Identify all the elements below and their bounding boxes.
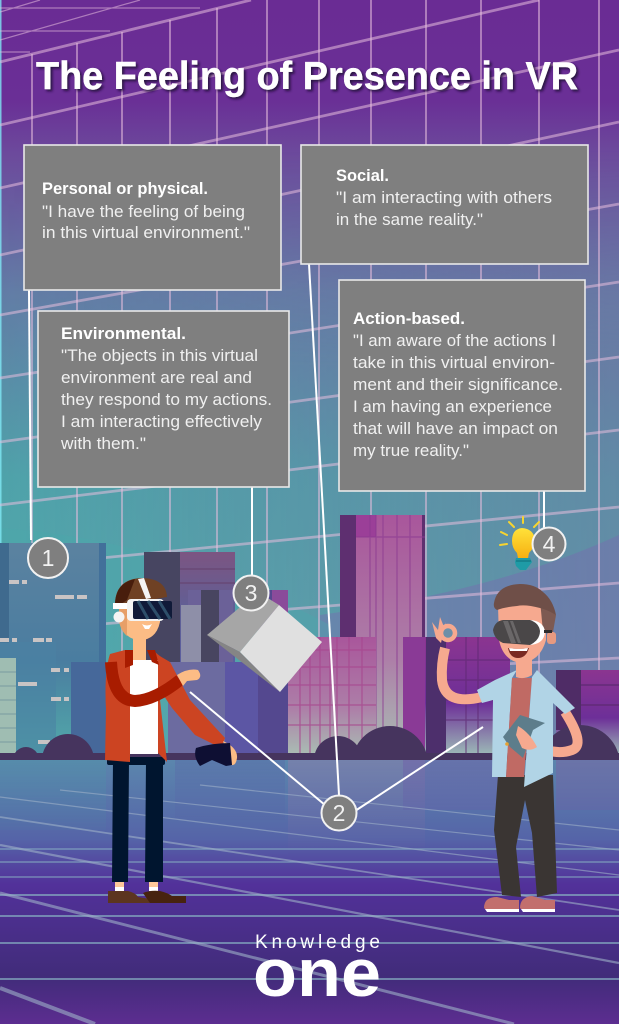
badge 2: 2 xyxy=(333,800,345,826)
hand and controller xyxy=(223,741,237,765)
vr headset xyxy=(113,603,133,609)
neck xyxy=(516,658,532,678)
shoes xyxy=(484,897,519,912)
building: tall magenta tower xyxy=(340,515,425,757)
panel: social: Social. xyxy=(336,167,389,185)
shirt xyxy=(477,670,517,777)
panel: environmental: with them." xyxy=(60,435,146,453)
badge 3 xyxy=(234,576,268,610)
character: man in blue shirt xyxy=(432,584,578,912)
hair xyxy=(494,584,556,615)
panel: environmental: they respond to my actions. xyxy=(61,391,272,409)
icon: light bulb xyxy=(500,517,539,570)
panel: action-based: Action-based. xyxy=(353,310,465,328)
badge 4 xyxy=(532,528,566,560)
logo: Knowledge one: one xyxy=(253,935,381,1011)
head xyxy=(119,600,160,640)
controller and hand xyxy=(503,715,545,758)
badge 1: 1 xyxy=(42,545,54,571)
jacket back arm xyxy=(158,655,225,748)
panel: personal or physical: in this virtual environment." xyxy=(42,224,250,242)
connector lines xyxy=(29,264,544,811)
perspective grid in sky xyxy=(0,0,619,700)
front arm xyxy=(111,662,180,701)
character: man in red jacket xyxy=(105,578,237,903)
building: blue tower left xyxy=(0,543,106,757)
panel: environmental: "The objects in this virtual xyxy=(61,347,258,365)
badge 4: 4 xyxy=(543,531,556,557)
panel: environmental: I am interacting effectively xyxy=(61,413,263,431)
title: The Feeling of Presence in VR xyxy=(36,55,578,98)
neck xyxy=(133,636,146,666)
legs xyxy=(112,760,163,882)
badge 2 xyxy=(322,796,356,830)
panel: personal or physical xyxy=(24,145,281,290)
panel: social xyxy=(301,145,588,264)
badge 1 xyxy=(28,538,68,578)
jacket body xyxy=(105,650,167,762)
badge 3: 3 xyxy=(245,580,257,606)
water ground xyxy=(0,760,619,1024)
panel: action-based xyxy=(339,280,585,491)
panel: action-based: "I am aware of the actions I xyxy=(353,332,556,350)
right arm xyxy=(535,712,578,752)
socks and shoes xyxy=(115,882,158,887)
city skyline xyxy=(0,515,619,805)
panel: environmental: environment are real and xyxy=(61,369,252,387)
vr visor xyxy=(493,620,542,645)
bushes and shoreline xyxy=(0,725,619,805)
building: pink block xyxy=(288,637,376,757)
panel: personal or physical: "I have the feeling of being xyxy=(42,203,245,221)
panel: personal or physical: Personal or physical. xyxy=(42,180,208,198)
panel: action-based: that will have an impact on xyxy=(353,420,558,438)
head xyxy=(498,605,546,663)
icon: virtual cube xyxy=(207,592,322,692)
panel: action-based: ment and their significance. xyxy=(353,376,563,394)
panel: social: in the same reality." xyxy=(336,211,483,229)
building: magenta block right xyxy=(403,637,619,757)
panel: environmental xyxy=(38,311,289,487)
panel: action-based: take in this virtual environ- xyxy=(353,354,555,372)
raised arm and hand xyxy=(442,648,482,699)
logo: Knowledge one: Knowledge xyxy=(255,932,380,953)
panel: social: "I am interacting with others xyxy=(336,189,552,207)
building: purple tower middle xyxy=(144,552,288,760)
trousers xyxy=(494,775,557,897)
panel: action-based: my true reality." xyxy=(353,442,469,460)
panel: action-based: I am having an experience xyxy=(353,398,552,416)
panel: environmental: Environmental. xyxy=(61,325,186,343)
background sky xyxy=(0,0,619,753)
mouth xyxy=(508,648,529,658)
